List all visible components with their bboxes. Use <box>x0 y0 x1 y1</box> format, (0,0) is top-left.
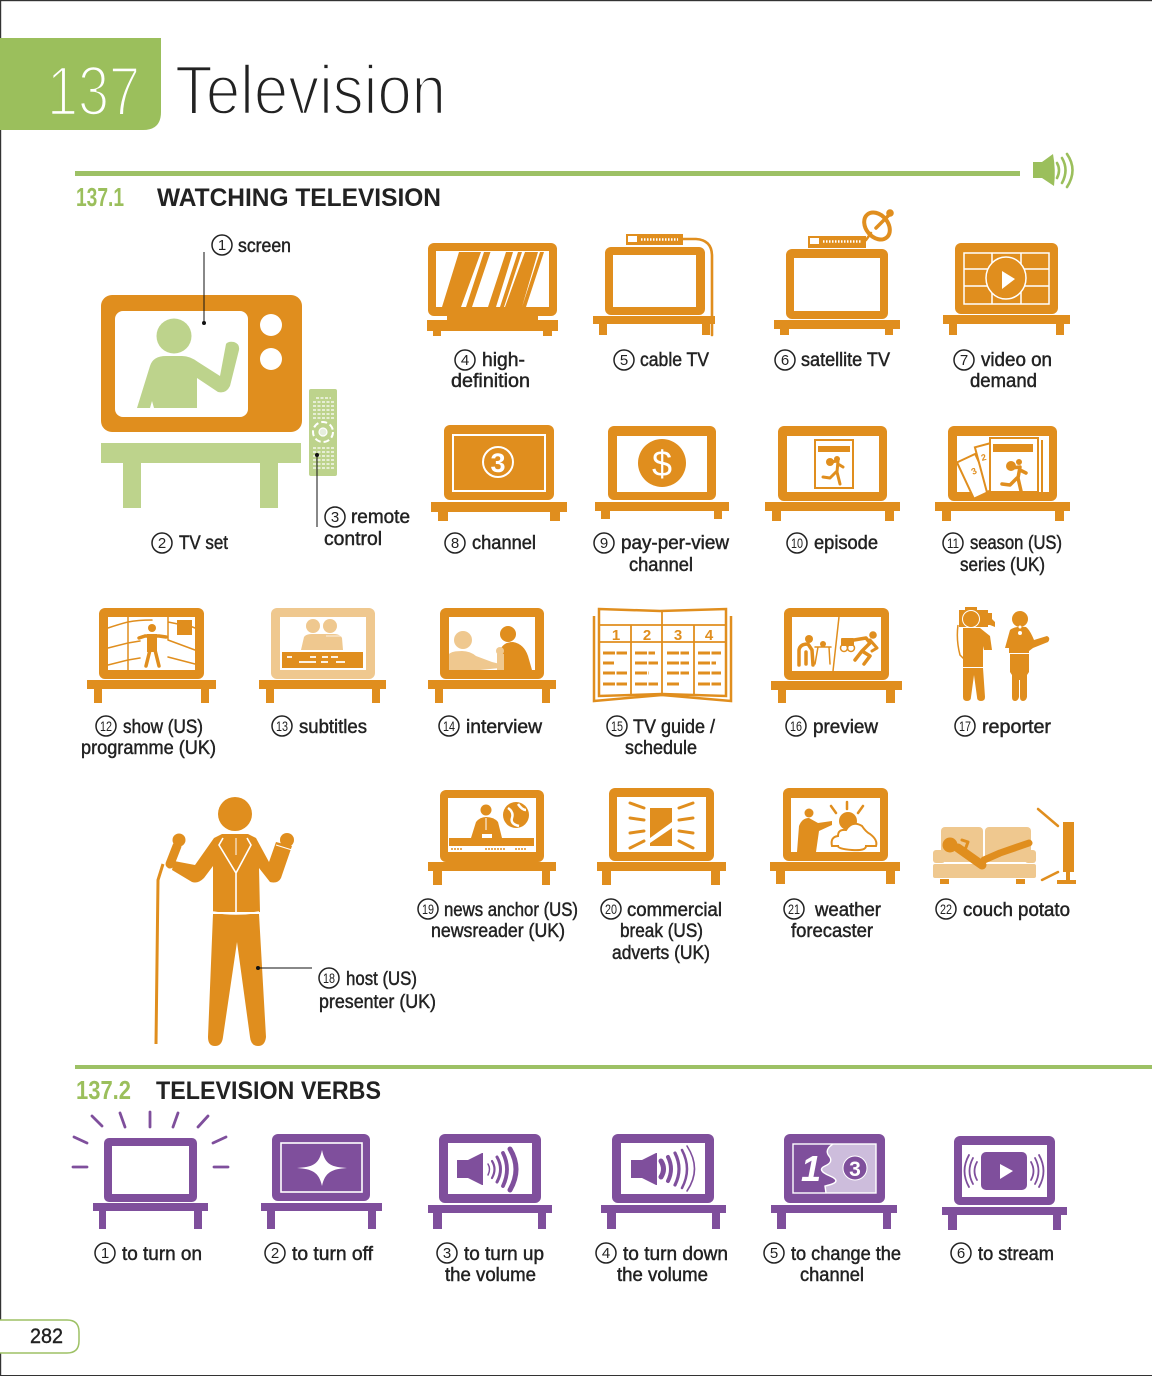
icon: subtitles <box>259 608 386 703</box>
icon: audio speaker <box>1033 154 1072 187</box>
label: to turn up the volume: to turn up <box>464 1244 544 1265</box>
verb 6: to stream <box>942 1136 1067 1265</box>
label: to turn up the volume: the volume <box>445 1265 536 1286</box>
section heading 137.1: WATCHING TELEVISION <box>157 184 441 212</box>
label: to change the channel: channel <box>800 1265 864 1286</box>
verb 3: to turn up the volume <box>428 1134 552 1286</box>
item 9: pay-per-view channel <box>594 426 729 576</box>
icon: commercial break <box>597 788 726 885</box>
label: subtitles: subtitles <box>299 717 367 738</box>
label: channel: 8 <box>451 535 459 552</box>
icon: video on demand <box>943 243 1070 335</box>
label: screen: screen <box>238 236 291 257</box>
title: Television <box>175 51 446 129</box>
icon: change channel: 3 <box>849 1158 861 1181</box>
label: channel: channel <box>472 533 536 554</box>
label: host / presenter: host (US) <box>346 969 417 990</box>
label: season / series <box>943 533 1062 576</box>
icon: host figure <box>156 797 294 1046</box>
label: weather forecaster: 21 <box>788 901 800 917</box>
label: to stream: to stream <box>978 1244 1054 1265</box>
label: to turn on: 1 <box>101 1245 109 1262</box>
label: remote control: remote <box>351 507 410 528</box>
icon: season posters: 2 <box>980 452 987 463</box>
label: reporter: reporter <box>982 717 1052 738</box>
label: TV set <box>152 533 229 554</box>
icon: cable TV <box>593 234 715 335</box>
icon: high-definition TV <box>427 243 558 336</box>
label: TV guide / schedule <box>607 716 716 759</box>
label: to change the channel: to change the <box>791 1244 901 1265</box>
label: commercial break / adverts: adverts (UK) <box>612 943 710 964</box>
label: TV set: TV set <box>179 533 229 554</box>
page number tab: 282 <box>30 1325 63 1348</box>
icon: TV turning off <box>261 1134 382 1229</box>
label: pay-per-view channel: pay-per-view <box>621 533 729 554</box>
label: commercial break / adverts: commercial <box>627 900 722 921</box>
item 19: news anchor / newsreader <box>418 790 578 942</box>
item: main TV set with labels <box>101 235 410 554</box>
label: host / presenter: presenter (UK) <box>319 992 436 1013</box>
icon: episode <box>765 426 900 521</box>
icon: show <box>87 608 216 703</box>
label: subtitles <box>272 716 367 738</box>
label: weather forecaster: weather <box>814 900 882 921</box>
label: host / presenter: 18 <box>323 970 335 986</box>
label: cable TV: 5 <box>620 352 628 369</box>
label: cable TV <box>614 350 709 371</box>
item 16: preview <box>771 608 902 738</box>
label: remote control: 3 <box>331 509 339 526</box>
label: interview: interview <box>466 717 542 738</box>
verb 4: to turn down the volume <box>596 1134 728 1286</box>
label: show / programme: show (US) <box>123 717 203 738</box>
section rule 137.2 <box>75 1065 1152 1069</box>
item 20: commercial break / adverts <box>597 788 726 964</box>
icon: TV guide: 2 <box>643 627 651 644</box>
label: satellite TV: 6 <box>781 352 789 369</box>
label: news anchor / newsreader: newsreader (UK) <box>431 921 565 942</box>
item 7: video on demand <box>943 243 1070 392</box>
icon: news anchor <box>428 790 556 885</box>
item 10: episode <box>765 426 900 554</box>
label: to turn off: 2 <box>271 1245 279 1262</box>
item 8: channel <box>431 425 567 554</box>
label: weather forecaster: forecaster <box>791 921 874 942</box>
item 21: weather forecaster <box>770 788 900 942</box>
item 18: host / presenter <box>156 797 436 1046</box>
icon: change channel <box>771 1134 897 1229</box>
label: video on demand <box>954 350 1052 392</box>
label: to turn down the volume: the volume <box>617 1265 708 1286</box>
label: pay-per-view channel: channel <box>629 555 693 576</box>
label: to stream: 6 <box>957 1245 965 1262</box>
verb 2: to turn off <box>261 1134 382 1265</box>
label: show / programme: 12 <box>100 718 112 734</box>
label: host / presenter <box>256 966 436 1013</box>
label: screen: 1 <box>218 237 226 254</box>
icon: volume up <box>428 1134 552 1229</box>
label: news anchor / newsreader: news anchor (US) <box>444 900 578 921</box>
icon: remote control <box>309 389 337 476</box>
icon: season posters: 3 <box>970 466 978 477</box>
icon: weather forecaster <box>770 788 900 884</box>
item 17: reporter <box>955 607 1052 738</box>
icon: TV turning on <box>73 1112 228 1229</box>
label: news anchor / newsreader: 19 <box>422 901 434 917</box>
label: weather forecaster <box>784 899 882 942</box>
label: season / series: season (US) <box>970 533 1062 554</box>
label: reporter: 17 <box>959 718 971 734</box>
label: remote control <box>315 453 410 550</box>
item 11: season / series <box>935 426 1070 576</box>
label: high-definition: definition <box>451 371 530 392</box>
section heading 137.2 <box>76 1075 381 1105</box>
section rule 137.1 <box>75 171 1020 176</box>
icon: preview <box>771 608 902 703</box>
item 12: show / programme <box>81 608 216 759</box>
item 13: subtitles <box>259 608 386 738</box>
label: preview <box>786 716 878 738</box>
verb 1: to turn on <box>73 1112 228 1265</box>
icon: channel: 3 <box>490 448 506 478</box>
chapter number tab: 137 <box>47 52 140 130</box>
label: video on demand: video on <box>981 350 1052 371</box>
label: satellite TV: satellite TV <box>801 350 890 371</box>
icon: streaming <box>942 1136 1067 1230</box>
label: high-definition: high- <box>482 350 525 371</box>
icon: TV set <box>101 295 302 508</box>
label: interview: 14 <box>443 718 455 734</box>
icon: TV guide: 3 <box>674 627 682 644</box>
section heading 137.2: 137.2 <box>76 1075 131 1105</box>
label: video on demand: demand <box>970 371 1037 392</box>
item 5: cable TV <box>593 234 715 371</box>
label: cable TV: cable TV <box>640 350 709 371</box>
icon: interview <box>428 608 556 703</box>
label: to turn on: to turn on <box>122 1244 202 1265</box>
label: preview: preview <box>813 717 878 738</box>
icon: season posters <box>935 426 1070 521</box>
icon: TV guide: 1 <box>612 627 620 644</box>
label: commercial break / adverts: 20 <box>605 901 617 917</box>
label: interview <box>439 716 542 738</box>
label: show / programme <box>81 716 216 759</box>
icon: pay-per-view <box>595 426 729 519</box>
label: high-definition: 4 <box>461 352 469 369</box>
icon: reporter and cameraman <box>957 607 1049 701</box>
page number tab <box>0 1320 79 1353</box>
label: commercial break / adverts: break (US) <box>620 921 703 942</box>
label: channel <box>445 533 536 554</box>
section heading 137.2: TELEVISION VERBS <box>156 1077 381 1105</box>
label: commercial break / adverts <box>601 899 722 964</box>
item 22: couch potato <box>933 809 1076 921</box>
label: to turn up the volume <box>437 1243 544 1286</box>
label: pay-per-view channel <box>594 533 729 576</box>
item 6: satellite TV <box>774 207 900 371</box>
label: high-definition <box>451 350 530 392</box>
label: couch potato: 22 <box>940 901 952 917</box>
label: to turn down the volume: 4 <box>602 1245 610 1262</box>
item 4: high-definition <box>427 243 558 392</box>
chapter number tab <box>0 38 161 130</box>
label: remote control: control <box>324 529 382 550</box>
label: episode <box>787 533 878 554</box>
icon: satellite TV <box>774 207 900 335</box>
label: season / series: 11 <box>947 535 959 551</box>
label: TV guide / schedule: 15 <box>611 718 623 734</box>
label: video on demand: 7 <box>960 352 968 369</box>
icon: TV guide <box>594 609 731 701</box>
label: screen <box>202 235 291 325</box>
verb 5: to change the channel <box>764 1134 901 1286</box>
label: pay-per-view channel: 9 <box>600 535 608 552</box>
label: to change the channel <box>764 1243 901 1286</box>
icon: change channel: 1 <box>801 1148 821 1189</box>
label: preview: 16 <box>790 718 802 734</box>
label: season / series: series (UK) <box>960 555 1045 576</box>
label: subtitles: 13 <box>276 718 288 734</box>
icon: TV guide: 4 <box>705 627 714 644</box>
label: TV guide / schedule: TV guide / <box>633 717 716 738</box>
label: to change the channel: 5 <box>770 1245 778 1262</box>
label: episode: episode <box>814 533 878 554</box>
label: TV set: 2 <box>158 535 166 552</box>
label: TV guide / schedule: schedule <box>625 738 697 759</box>
label: to turn down the volume: to turn down <box>623 1244 728 1265</box>
label: to turn up the volume: 3 <box>443 1245 451 1262</box>
label: couch potato: couch potato <box>963 900 1070 921</box>
label: to stream <box>951 1243 1054 1265</box>
icon: couch potato <box>933 809 1076 884</box>
icon: volume down <box>601 1134 726 1229</box>
section heading 137.1: 137.1 <box>76 182 124 212</box>
label: to turn off: to turn off <box>292 1244 374 1265</box>
label: episode: 10 <box>791 535 803 551</box>
label: to turn down the volume <box>596 1243 728 1286</box>
label: reporter <box>955 716 1052 738</box>
label: show / programme: programme (UK) <box>81 738 216 759</box>
icon: pay-per-view: $ <box>652 443 672 484</box>
item 14: interview <box>428 608 556 738</box>
label: news anchor / newsreader <box>418 899 578 942</box>
item 15: TV guide / schedule <box>594 609 731 759</box>
